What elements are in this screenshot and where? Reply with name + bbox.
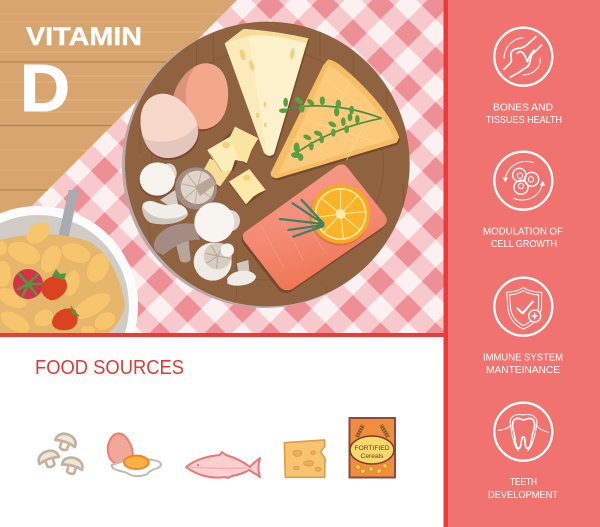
title [20, 23, 142, 126]
salmon fillet [241, 164, 387, 293]
benefit: immune system maintenance: IMMUNE SYSTEM [483, 352, 563, 364]
title: VITAMIN [26, 23, 142, 51]
heading: food sources: FOOD SOURCES [35, 357, 184, 379]
icon: cells [494, 152, 552, 210]
checked tablecloth [0, 0, 444, 333]
icon: fortified cereals box: FORTIFIED [354, 445, 390, 452]
red horizontal divider [0, 333, 444, 337]
cheese cubes [202, 127, 266, 206]
yellow cheese wedge [271, 59, 400, 180]
benefit: teeth development: DEVELOPMENT [488, 490, 558, 501]
bowl of cereal with strawberries [0, 190, 138, 333]
icon: joint [494, 28, 552, 86]
red vertical divider [444, 0, 448, 527]
rosemary sprig [280, 200, 323, 237]
strawberries [13, 269, 79, 330]
icon: cheese block [284, 440, 325, 477]
icon: fish [186, 452, 260, 478]
benefit: teeth development: TEETH [510, 477, 537, 488]
benefit: modulation of cell growth [483, 152, 563, 250]
icon: fortified cereals box [350, 418, 395, 478]
benefit: modulation of cell growth: MODULATION OF [483, 226, 563, 238]
benefit: immune system maintenance [483, 278, 563, 376]
thyme sprigs [279, 96, 382, 161]
wooden plate [122, 22, 410, 308]
benefit: bones and tissues health: BONES AND [493, 102, 553, 114]
icon: shield [494, 278, 552, 336]
icon: mushrooms [36, 431, 84, 476]
white lower area [0, 337, 444, 527]
mushrooms on plate [139, 162, 256, 286]
right panel [448, 0, 600, 527]
back egg [172, 63, 228, 132]
wooden table background [0, 0, 260, 240]
icon: egg [108, 433, 161, 476]
benefit: bones and tissues health: TISSUES HEALTH [486, 115, 562, 126]
lemon slice [310, 184, 370, 246]
title: D [20, 51, 70, 126]
benefit: immune system maintenance: MANTEINANCE [486, 365, 560, 376]
benefit: bones and tissues health [486, 28, 562, 126]
cereal pieces [0, 218, 119, 337]
pale cheese wedge [225, 29, 309, 158]
spoon [58, 190, 79, 236]
benefit: teeth development [488, 403, 558, 501]
benefit: modulation of cell growth: CELL GROWTH [491, 239, 557, 250]
icon: tooth [494, 403, 552, 461]
icon: fortified cereals box: Cereals [360, 453, 384, 460]
cereal mass [0, 234, 125, 340]
front egg [140, 94, 199, 160]
